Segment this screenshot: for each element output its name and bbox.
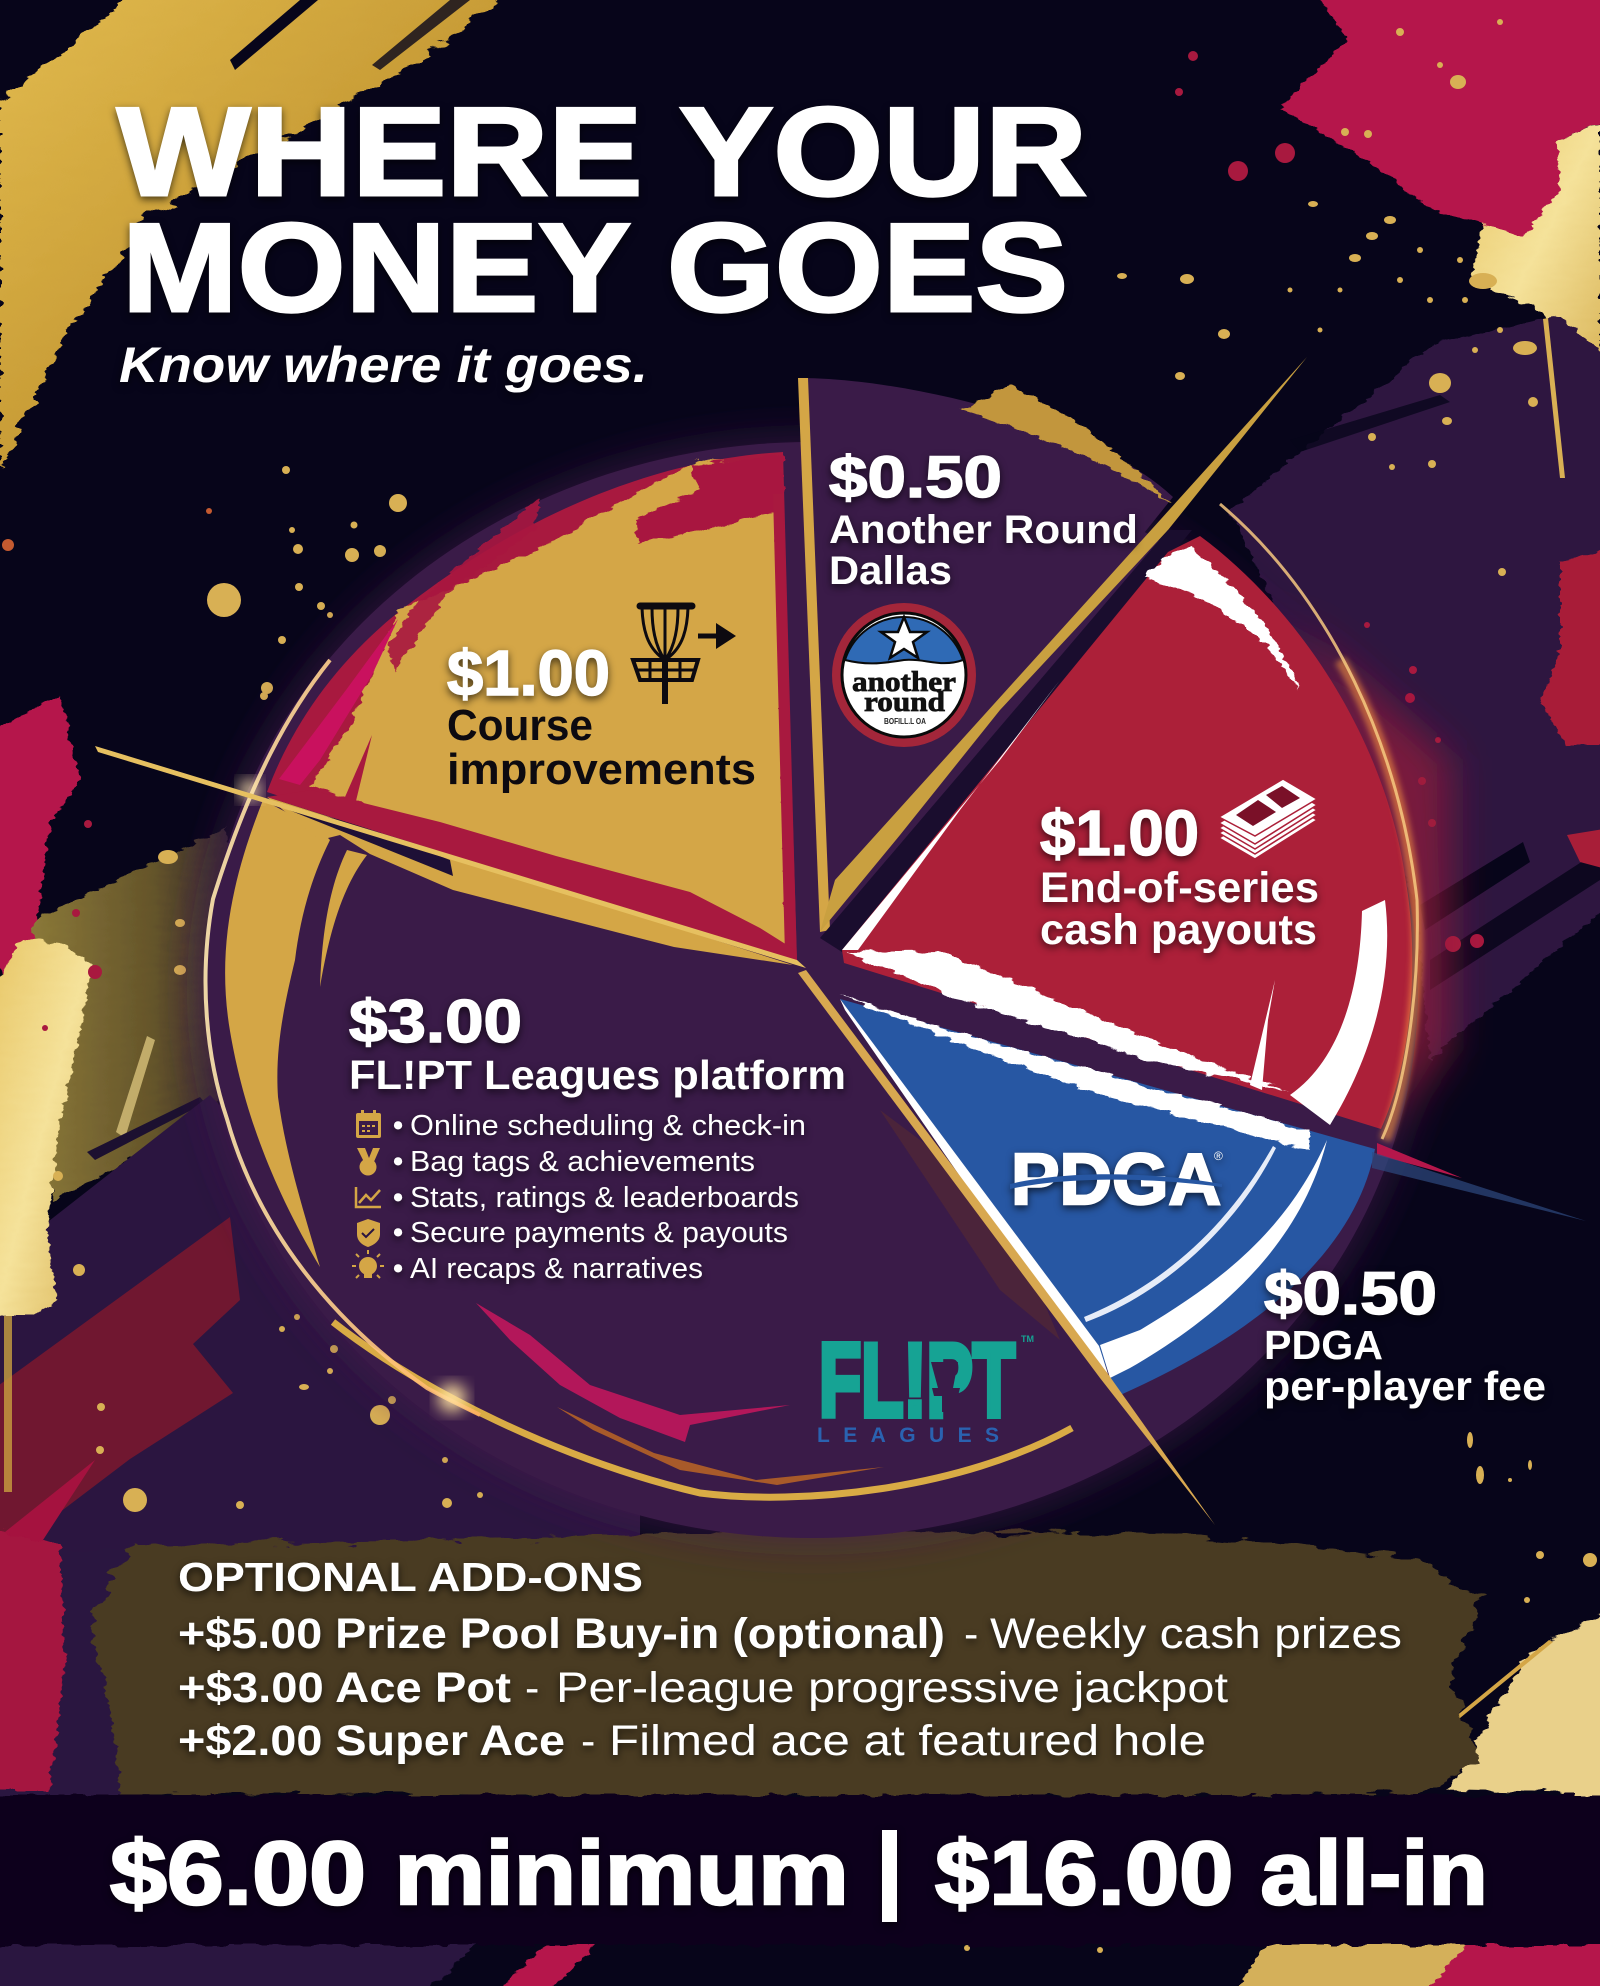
spoke: right crimson streak: [1377, 1143, 1462, 1178]
faint brown streak: [880, 1110, 1060, 1340]
left crimson splat: [0, 696, 80, 987]
top-right cream gold: [1470, 125, 1600, 383]
dark sliver: [279, 806, 453, 876]
left edge crimson: [0, 1530, 65, 1790]
spoke: left gold streak: [95, 746, 806, 968]
logo: PDGA: PDGA: [1011, 1140, 1221, 1220]
slice: FL!PT Leagues platform: [206, 442, 1418, 1538]
label: cash payouts: [1040, 797, 1319, 954]
footer price text: [110, 1824, 1488, 1924]
spoke: right blue streak: [1372, 1152, 1586, 1221]
label: PDGA fee: $0.50: [1264, 1260, 1437, 1327]
label: cash payouts: cash payouts: [1040, 906, 1317, 954]
right purple: [1230, 315, 1600, 1060]
label: course improvements: improvements: [447, 745, 756, 794]
feature: scheduling: Online scheduling & check-in: [410, 1110, 806, 1142]
label: cash payouts: $1.00: [1040, 797, 1199, 869]
icon: calendar: [356, 1110, 381, 1138]
label: PDGA fee: per-player fee: [1264, 1363, 1546, 1409]
icon: disc golf basket with arrow: [633, 606, 736, 704]
left olive brush: [33, 828, 235, 1201]
logo: FL!PT Leagues: LEAGUES: [817, 1424, 999, 1447]
feature: recaps: AI recaps & narratives: [410, 1253, 703, 1285]
label: platform: $3.00: [349, 988, 522, 1055]
pie halo glow: [200, 438, 1450, 1542]
add-ons heading: OPTIONAL ADD-ONS: [178, 1554, 643, 1600]
label: cash payouts: End-of-series: [1040, 864, 1319, 912]
left purple: [0, 1095, 640, 1560]
top-right crimson: [1280, 0, 1600, 236]
feature: stats: Stats, ratings & leaderboards: [410, 1182, 799, 1214]
logo: PDGA: ®: [1214, 1149, 1223, 1163]
orange streak: [557, 1407, 884, 1485]
feature: bag tags: •: [393, 1146, 403, 1178]
add-on: super ace: -: [581, 1717, 595, 1765]
panel brush: optional add-ons: [90, 1530, 1480, 1800]
title: MONEY GOES: [122, 197, 1068, 338]
add-on: ace pot: -: [525, 1664, 539, 1712]
label: course improvements: $1.00: [447, 637, 610, 709]
pie rim light: [206, 660, 480, 1415]
logo: FL!PT Leagues: FL!PT: [819, 1323, 1015, 1439]
icon: shield: [357, 1219, 380, 1247]
logo: another round: BOFILL.L OA: [884, 717, 926, 726]
icon: medal: [357, 1148, 380, 1176]
left cream gold splat: [0, 938, 93, 1316]
logo: another round: round: [864, 686, 945, 718]
lower right cream gold: [1449, 1610, 1600, 1795]
add-on: super ace: [178, 1717, 1206, 1765]
feature: stats: •: [393, 1182, 403, 1214]
icon: stack of cash: [1219, 779, 1317, 859]
right rim light: [1220, 504, 1417, 1140]
footer band: [0, 1795, 1600, 1945]
platform feature list: [393, 1110, 806, 1285]
feature: scheduling: •: [393, 1110, 403, 1142]
add-on: ace pot: Per-league progressive jackpot: [556, 1664, 1228, 1712]
gold wedge under spoke: [267, 797, 793, 965]
inner gold sliver: [320, 850, 367, 987]
logo: FL!PT Leagues: [817, 1323, 1034, 1447]
gold crescent band: [225, 800, 330, 1267]
add-on: ace pot: +$3.00 Ace Pot: [178, 1664, 511, 1712]
label: another round: [829, 445, 1138, 593]
pie chart: [95, 357, 1586, 1542]
left edge purple: [0, 1550, 140, 1800]
label: platform: [349, 988, 846, 1098]
title: WHERE YOUR: [117, 81, 1087, 222]
bottom gold stripe: [333, 1322, 1072, 1497]
icon: light bulb: [352, 1250, 384, 1278]
subtitle: Know where it goes.: [119, 337, 648, 393]
feature: recaps: •: [393, 1253, 403, 1285]
add-on: prize pool: Weekly cash prizes: [990, 1610, 1402, 1658]
slice: end-of-series cash payouts: [842, 536, 1412, 1129]
label: another round: $0.50: [829, 445, 1002, 510]
add-on: prize pool: [178, 1610, 1402, 1658]
add-on: prize pool: +$5.00 Prize Pool Buy-in (optional): [178, 1610, 945, 1658]
add-on: prize pool: -: [964, 1610, 978, 1658]
label: platform: FL!PT Leagues platform: [349, 1052, 846, 1098]
top-left gold brush: [0, 0, 515, 468]
feature: bag tags: Bag tags & achievements: [410, 1146, 755, 1178]
right crimson: [1540, 548, 1600, 746]
label: PDGA fee: PDGA: [1264, 1322, 1383, 1368]
logo: another round: another: [852, 666, 956, 698]
platform feature icons: [352, 1110, 384, 1278]
logo: FL!PT Leagues: TM: [1021, 1334, 1034, 1344]
add-on: super ace: Filmed ace at featured hole: [609, 1717, 1206, 1765]
icon: line chart: [356, 1187, 381, 1207]
add-on: super ace: +$2.00 Super Ace: [178, 1717, 565, 1765]
spoke: lower right gold streak: [798, 970, 1215, 1525]
label: course improvements: Course: [447, 701, 593, 750]
label: another round: Dallas: [829, 549, 952, 593]
title: [117, 81, 1087, 338]
label: course improvements: [447, 637, 756, 794]
logo: another round: [832, 603, 976, 747]
feature: payments: •: [393, 1217, 403, 1249]
bottom strip brushes: [0, 1905, 1600, 1986]
label: PDGA fee: [1264, 1260, 1546, 1409]
slice: course improvements: [267, 452, 797, 965]
label: another round: Another Round: [829, 508, 1138, 552]
add-on: ace pot: [178, 1664, 1228, 1712]
footer price text: $16.00 all-in: [935, 1824, 1488, 1924]
panel text: optional add-ons: [178, 1554, 1402, 1765]
slice: PDGA: [840, 995, 1375, 1396]
left dark crimson band: [0, 1217, 240, 1536]
magenta streak: [476, 1303, 790, 1442]
feature: payments: Secure payments & payouts: [410, 1217, 788, 1249]
slice: Another Round Dallas: [798, 357, 1307, 952]
footer price text: $6.00 minimum: [110, 1824, 849, 1924]
